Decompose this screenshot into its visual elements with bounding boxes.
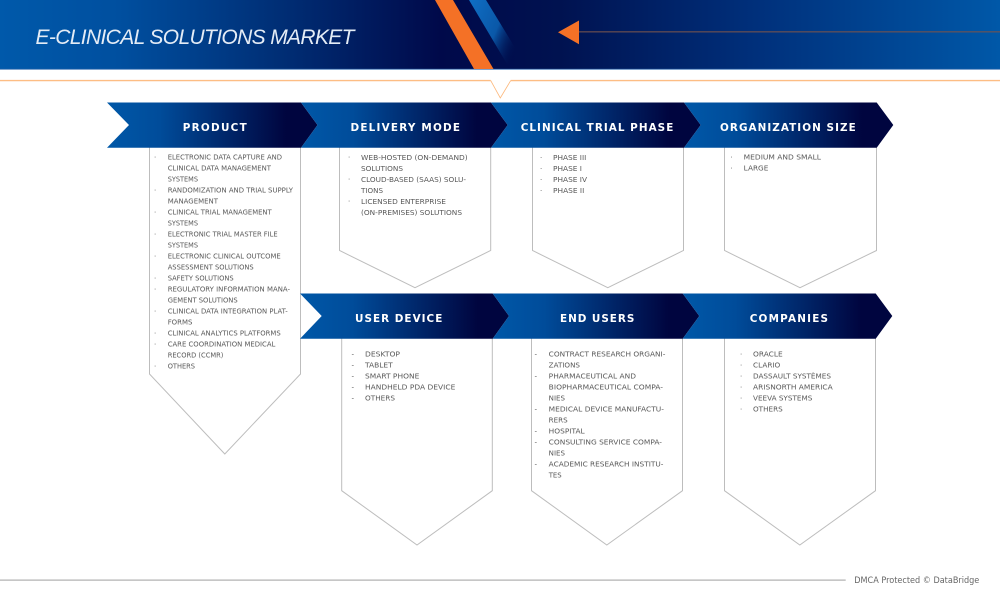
panel: end users list: CONSULTING SERVICE COMPA-	[549, 439, 662, 447]
panel: end users list: NIES	[549, 450, 566, 458]
panel: product list: RANDOMIZATION AND TRIAL SUPPLY	[168, 187, 294, 195]
blue diagonal stripe	[469, 0, 528, 69]
panel: companies list: ·	[740, 394, 742, 402]
panel: companies list: ·	[740, 362, 742, 370]
panel: organization size list: ·	[730, 164, 733, 172]
heading: user device	[300, 294, 509, 339]
panel: companies list: ·	[740, 384, 742, 392]
heading: companies: COMPANIES	[750, 313, 828, 325]
panel: user device list: -	[352, 362, 354, 370]
panel: product list: MANAGEMENT	[168, 198, 219, 206]
panel: user device list: SMART PHONE	[365, 373, 419, 381]
panel: product list: ASSESSMENT SOLUTIONS	[168, 264, 254, 272]
panel: end users list: -	[534, 350, 538, 358]
panel: user device list: HANDHELD PDA DEVICE	[365, 384, 455, 392]
heading: end users: END USERS	[560, 313, 634, 325]
panel: clinical trial phase list: PHASE I	[553, 165, 582, 173]
arrow: header pointer	[558, 20, 1000, 44]
panel: end users list: CONTRACT RESEARCH ORGANI-	[549, 351, 666, 359]
heading: clinical trial phase	[491, 102, 701, 148]
panel: end users list: NIES	[549, 395, 566, 403]
panel: clinical trial phase list: ·	[540, 176, 542, 184]
panel: product list: CLINICAL DATA INTEGRATION PLAT-	[168, 308, 288, 316]
panel: product list: SAFETY SOLUTIONS	[168, 275, 234, 283]
panel: clinical trial phase list	[532, 147, 684, 288]
panel: companies list: ARISNORTH AMERICA	[753, 384, 833, 392]
panel: product list: ·	[154, 362, 156, 370]
panel: product list: CLINICAL TRIAL MANAGEMENT	[168, 209, 272, 217]
panel: user device list: TABLET	[364, 362, 393, 370]
panel: companies list: ·	[740, 350, 742, 358]
panel: product list: RECORD (CCMR)	[168, 352, 224, 360]
panel: product list: ·	[154, 208, 156, 216]
panel: organization size list: ·	[730, 153, 733, 161]
heading: companies	[683, 294, 892, 339]
panel: companies list: OTHERS	[753, 406, 783, 414]
panel: product list: ·	[154, 274, 156, 282]
panel: end users list: -	[534, 406, 538, 414]
panel: clinical trial phase list: ·	[540, 165, 542, 173]
panel: clinical trial phase list: ·	[540, 154, 542, 162]
panel: product list: CLINICAL DATA MANAGEMENT	[168, 165, 272, 173]
panel: product list	[150, 147, 300, 454]
panel: product list: ·	[154, 252, 156, 260]
panel: product list: ·	[154, 230, 156, 238]
heading: product: PRODUCT	[183, 122, 248, 134]
panel: product list: REGULATORY INFORMATION MANA-	[168, 286, 290, 294]
panel: companies list: DASSAULT SYSTÈMES	[753, 372, 832, 381]
panel: product list: ·	[154, 308, 156, 316]
panel: product list: CARE COORDINATION MEDICAL	[168, 341, 275, 349]
panel: delivery mode list: ·	[348, 154, 350, 162]
panel: delivery mode list: WEB-HOSTED (ON-DEMAND)	[361, 154, 468, 162]
header banner	[0, 0, 1000, 70]
panel: product list: ·	[154, 186, 156, 194]
panel: delivery mode list: TIONS	[360, 187, 384, 195]
panel: end users list: HOSPITAL	[549, 428, 585, 436]
heading: clinical trial phase: CLINICAL TRIAL PHASE	[521, 122, 673, 134]
heading: product	[107, 102, 318, 148]
panel: end users list: ZATIONS	[549, 362, 581, 370]
panel: organization size list	[724, 147, 876, 288]
panel: clinical trial phase list: PHASE IV	[553, 176, 587, 184]
panel: clinical trial phase list: ·	[540, 187, 542, 195]
panel: product list: SYSTEMS	[168, 242, 199, 250]
panel: organization size list: MEDIUM AND SMALL	[744, 154, 821, 162]
panel: end users list: -	[534, 428, 538, 436]
panel: end users list: TES	[548, 472, 562, 480]
panel: companies list	[724, 338, 876, 545]
panel: delivery mode list: CLOUD-BASED (SAAS) SOLU-	[361, 176, 466, 184]
panel: companies list: CLARIO	[753, 362, 781, 370]
panel: product list: SYSTEMS	[168, 176, 199, 184]
orange diagonal stripe	[435, 0, 494, 69]
panel: delivery mode list: ·	[348, 198, 350, 206]
panel: clinical trial phase list: PHASE III	[553, 154, 586, 162]
heading: end users	[493, 294, 699, 339]
panel: user device list: OTHERS	[365, 395, 396, 403]
panel: product list: ELECTRONIC TRIAL MASTER FILE	[168, 231, 278, 239]
panel: product list: GEMENT SOLUTIONS	[168, 297, 238, 305]
panel: product list: OTHERS	[168, 363, 196, 371]
panel: user device list: -	[352, 350, 354, 358]
panel: clinical trial phase list: PHASE II	[553, 187, 584, 195]
orange rule with notch	[0, 81, 1000, 98]
panel: user device list: DESKTOP	[365, 351, 400, 359]
panel: product list: ·	[154, 154, 156, 162]
panel: product list: SYSTEMS	[168, 220, 199, 228]
panel: product list: ·	[154, 286, 156, 294]
panel: end users list: -	[534, 372, 538, 380]
panel: delivery mode list: SOLUTIONS	[361, 165, 404, 173]
heading: user device: USER DEVICE	[355, 313, 442, 325]
panel: user device list: -	[352, 384, 354, 392]
panel: product list: ·	[154, 340, 156, 348]
title: E-CLINICAL SOLUTIONS MARKET	[36, 26, 357, 49]
panel: end users list: BIOPHARMACEUTICAL COMPA-	[549, 384, 664, 392]
panel: companies list: ·	[740, 406, 742, 414]
panel: user device list: -	[352, 372, 354, 380]
heading: delivery mode	[301, 102, 508, 148]
panel: end users list: MEDICAL DEVICE MANUFACTU-	[549, 406, 664, 414]
heading: delivery mode: DELIVERY MODE	[350, 122, 460, 134]
panel: delivery mode list: ·	[348, 176, 350, 184]
panel: delivery mode list: (ON-PREMISES) SOLUTIONS	[361, 209, 463, 217]
panel: user device list: -	[352, 394, 354, 402]
heading: organization size	[684, 102, 893, 148]
heading: organization size: ORGANIZATION SIZE	[720, 122, 856, 134]
panel: end users list: PHARMACEUTICAL AND	[549, 373, 636, 381]
panel: product list: FORMS	[168, 319, 193, 327]
panel: end users list: -	[534, 438, 538, 446]
panel: product list: ELECTRONIC CLINICAL OUTCOME	[168, 253, 281, 261]
panel: end users list: RERS	[549, 417, 568, 425]
panel: companies list: VEEVA SYSTEMS	[753, 395, 813, 403]
panel: product list: ELECTRONIC DATA CAPTURE AND	[168, 154, 282, 162]
panel: product list: ·	[154, 330, 156, 338]
panel: organization size list: LARGE	[744, 165, 768, 173]
panel: end users list: ACADEMIC RESEARCH INSTITU-	[549, 461, 664, 469]
panel: delivery mode list: LICENSED ENTERPRISE	[361, 198, 446, 206]
panel: end users list: -	[534, 460, 538, 468]
panel: companies list: ·	[740, 372, 742, 380]
panel: delivery mode list	[340, 147, 491, 288]
panel: user device list	[342, 338, 492, 545]
panel: product list: CLINICAL ANALYTICS PLATFORMS	[168, 330, 281, 338]
footer: DMCA Protected © DataBridge	[854, 575, 979, 585]
panel: companies list: ORACLE	[753, 351, 783, 359]
panel: end users list	[532, 338, 682, 545]
